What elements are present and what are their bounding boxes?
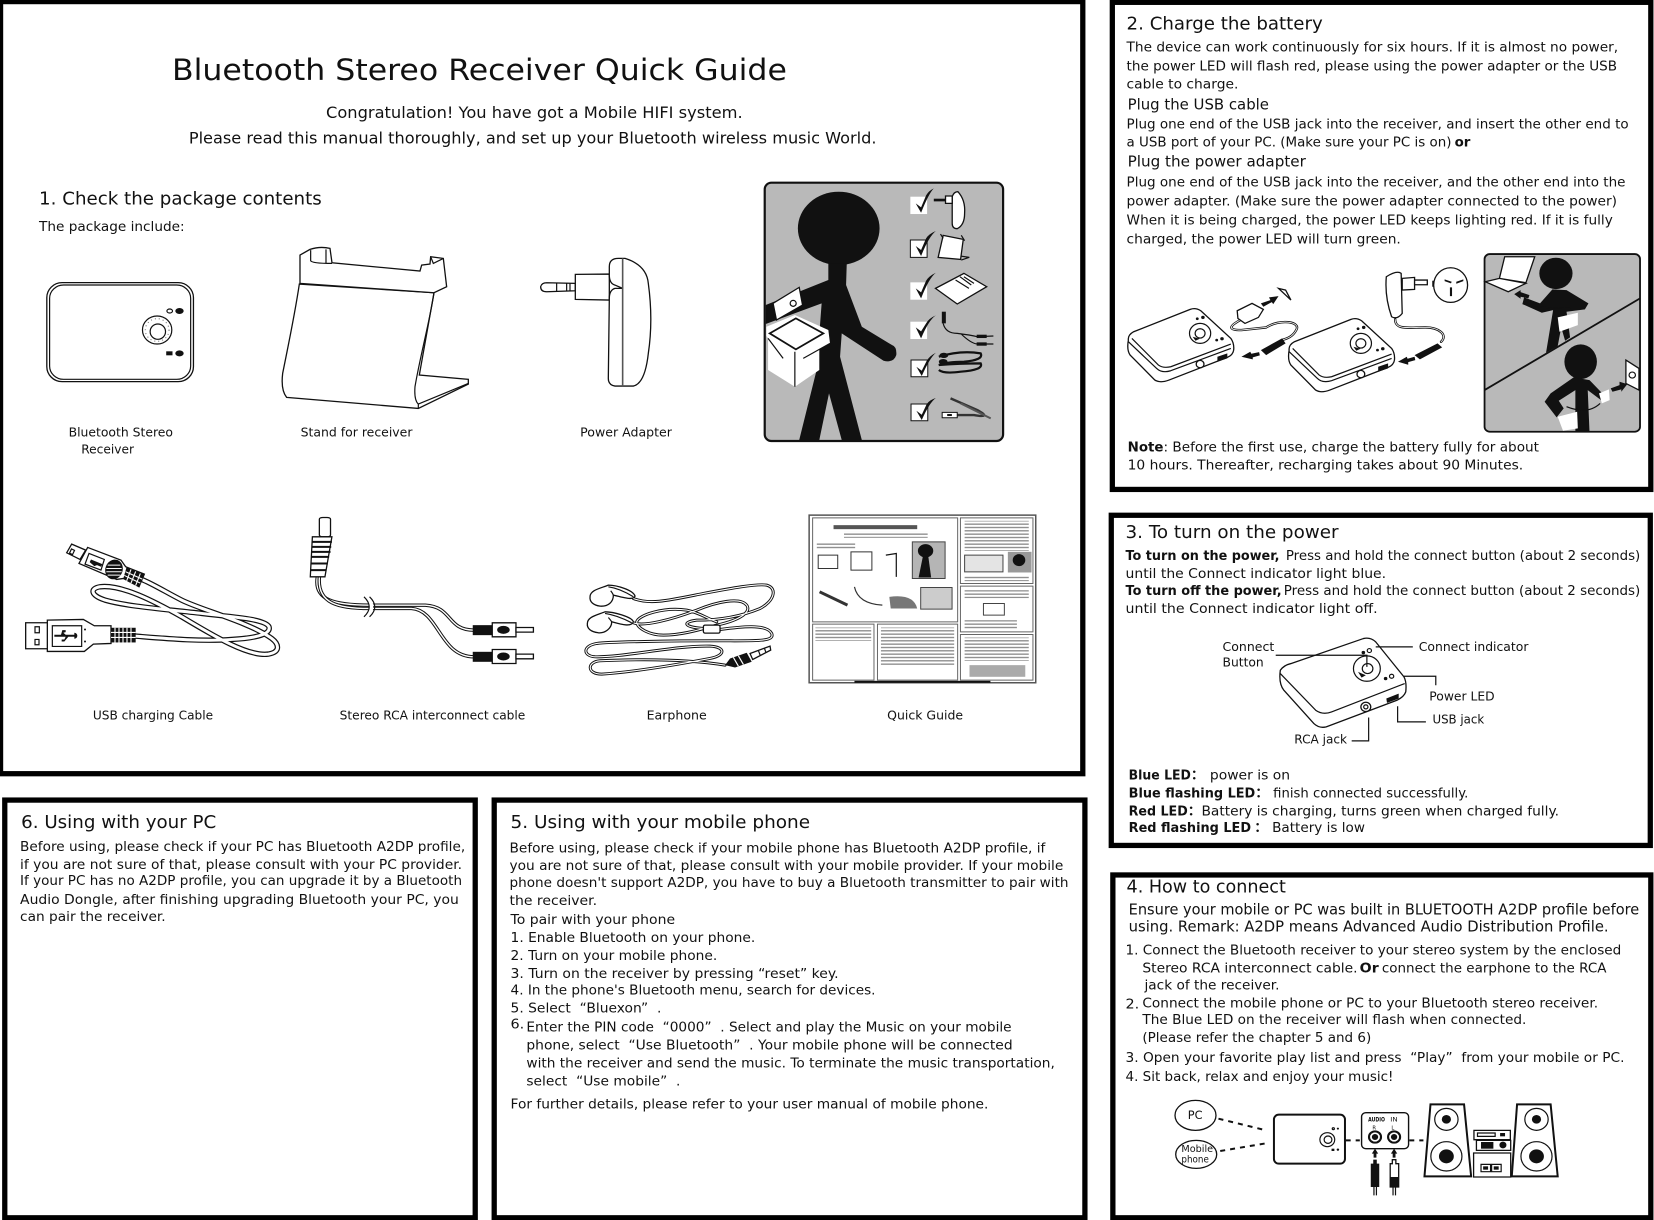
text: connection steps: 3. Open your favorite play list and press “Play” from your mobile or PC. xyxy=(1126,1050,1624,1066)
icon: receiver with power adapter xyxy=(1289,268,1468,392)
diagram: receiver with labelled parts xyxy=(1223,638,1529,747)
text: LED legend: Battery is low xyxy=(1272,820,1365,836)
illustration: charging connections xyxy=(1128,254,1640,432)
text: connection requirement: using. Remark: A2DP means Advanced Audio Distribution Profile. xyxy=(1129,918,1609,935)
labels: package row two: Stereo RCA interconnect cable xyxy=(340,707,526,722)
text: PC instructions xyxy=(20,839,465,925)
icon: laptop xyxy=(1485,257,1535,292)
diagram: receiver with labelled parts: USB jack xyxy=(1432,712,1485,727)
text: connection steps: 4. Sit back, relax and enjoy your music! xyxy=(1126,1069,1393,1085)
text: charging instructions: cable to charge. xyxy=(1127,77,1238,93)
person silhouette xyxy=(766,192,896,440)
text: connection steps: Or xyxy=(1360,961,1379,977)
text: charging instructions: The device can work continuously for six hours. If it is almost no power, xyxy=(1126,40,1618,56)
text: connection requirement xyxy=(1129,902,1639,935)
diagram: connection to speakers: R xyxy=(1372,1126,1376,1132)
panel: person illustration with checklist xyxy=(765,183,1003,441)
text: power instructions: until the Connect indicator light off. xyxy=(1126,601,1378,617)
panel: charging from laptop and outlet xyxy=(1485,254,1640,432)
text: pairing steps: 5. Select “Bluexon” . xyxy=(511,1001,661,1017)
text: LED legend xyxy=(1129,768,1559,836)
text: charging instructions xyxy=(1126,40,1629,248)
text: LED legend: ： xyxy=(1254,820,1268,836)
text: charging instructions: power adapter. (Make sure the power adapter connected to the power) xyxy=(1127,194,1617,210)
text: pairing steps: phone, select “Use Bluetooth” . Your mobile phone will be connected xyxy=(526,1038,1013,1054)
text: mobile phone introduction: the receiver. xyxy=(510,893,597,909)
text: PC instructions: if you are not sure of that, please consult with your PC provider. xyxy=(20,857,462,873)
diagram: connection to speakers: Mobile xyxy=(1181,1144,1213,1155)
text: connection steps: Connect the mobile phone or PC to your Bluetooth stereo receiver. xyxy=(1142,995,1598,1011)
text: pairing steps: For further details, please refer to your user manual of mobile phone. xyxy=(511,1097,988,1113)
diagram: connection to speakers: AUDIO xyxy=(1368,1116,1385,1123)
text: power instructions: until the Connect indicator light blue. xyxy=(1126,566,1386,582)
text: pairing steps: with the receiver and send the music. To terminate the music transportation, xyxy=(526,1055,1055,1071)
heading: using with PC: 6. Using with your PC xyxy=(21,813,216,833)
icon: mini earphones xyxy=(939,352,981,373)
text: mobile phone introduction: you are not sure of that, please consult with your mobile provider. If your mobile xyxy=(510,858,1063,874)
intro text: Please read this manual thoroughly, and set up your Bluetooth wireless music World. xyxy=(189,128,877,147)
panel: using with mobile phone xyxy=(494,800,1085,1218)
text: mobile phone introduction: phone doesn't support A2DP, you have to buy a Bluetooth transmitter to pair with xyxy=(510,875,1069,891)
text: PC instructions: Before using, please check if your PC has Bluetooth A2DP profile, xyxy=(20,839,465,855)
diagram: connection to speakers: L xyxy=(1391,1126,1394,1132)
labels: package row two: USB charging Cable xyxy=(93,707,213,722)
text: charging instructions: Plug the USB cable xyxy=(1128,97,1269,114)
text: battery note: 10 hours. Thereafter, recharging takes about 90 Minutes. xyxy=(1128,457,1523,473)
text: mobile phone introduction xyxy=(510,840,1069,909)
intro text xyxy=(189,103,877,147)
icon: earphones xyxy=(586,585,773,674)
text: power instructions: Press and hold the connect button (about 2 seconds) xyxy=(1284,583,1640,599)
icon: quick guide thumbnail xyxy=(809,515,1036,683)
diagram: connection to speakers: phone xyxy=(1181,1154,1209,1165)
diagram: receiver with labelled parts: Button xyxy=(1223,655,1264,670)
diagram: receiver with labelled parts: Connect indicator xyxy=(1419,639,1529,654)
icon: stereo RCA cable xyxy=(310,517,533,663)
labels: package row one: Receiver xyxy=(81,442,135,457)
text: pairing steps: select “Use mobile” . xyxy=(526,1073,680,1089)
person with pouch at laptop xyxy=(1514,258,1588,353)
diagram: receiver with labelled parts: Connect xyxy=(1223,639,1274,654)
text: connection steps: 1. Connect the Bluetooth receiver to your stereo system by the enclosed xyxy=(1126,943,1621,959)
text: power instructions: To turn on the power, xyxy=(1126,548,1280,564)
diagram: connection to speakers: IN xyxy=(1390,1116,1398,1123)
diagram: connection to speakers: PC xyxy=(1188,1109,1203,1122)
text: LED legend: Red LED xyxy=(1129,803,1188,819)
text: LED legend: Blue LED xyxy=(1129,768,1191,784)
panel: using with PC xyxy=(5,800,475,1218)
panel: charge the battery xyxy=(1112,2,1651,489)
labels: package row two: Earphone xyxy=(647,707,707,722)
text: charging instructions: When it is being charged, the power LED keeps lighting red. If it is fully xyxy=(1127,213,1613,229)
icon: mini USB cable xyxy=(942,398,991,418)
diagram: connection to speakers xyxy=(1175,1100,1558,1195)
checklist xyxy=(910,188,993,421)
labels: package row one xyxy=(69,425,673,457)
icon: receiver in hand xyxy=(773,287,803,320)
heading: check the package contents: 1. Check the package contents xyxy=(39,190,322,210)
heading: using with mobile phone: 5. Using with your mobile phone xyxy=(511,813,810,833)
icon: stand xyxy=(282,247,468,408)
text: LED legend: Red flashing LED xyxy=(1129,820,1251,836)
panel: title and package contents xyxy=(1,2,1083,774)
icon: power adapter xyxy=(541,258,651,386)
icon: mini RCA cable xyxy=(942,312,993,346)
icon: mini adapter xyxy=(934,192,965,229)
icon: mini guide xyxy=(935,273,987,304)
text: power instructions: To turn off the power, xyxy=(1126,583,1282,599)
text: PC instructions: can pair the receiver. xyxy=(20,909,166,925)
text: connection steps: jack of the receiver. xyxy=(1143,977,1280,993)
panel: how to connect xyxy=(1113,875,1651,1218)
text: battery note xyxy=(1128,439,1539,473)
intro text: Congratulation! You have got a Mobile HIFI system. xyxy=(326,103,743,122)
text: pairing steps: 4. In the phone's Bluetooth menu, search for devices. xyxy=(511,983,876,999)
icon: USB charging cable xyxy=(26,544,277,654)
text: pairing steps: To pair with your phone xyxy=(510,912,675,928)
text: charging instructions: Plug one end of the USB jack into the receiver, and the other end into the xyxy=(1127,175,1625,191)
text: pairing steps: Enter the PIN code “0000” . Select and play the Music on your mobile xyxy=(526,1020,1012,1036)
text: connection steps: The Blue LED on the receiver will flash when connected. xyxy=(1141,1012,1526,1028)
diagram: receiver with labelled parts: Power LED xyxy=(1429,688,1495,703)
heading: how to connect: 4. How to connect xyxy=(1127,877,1286,897)
text: battery note: : Before the first use, charge the battery fully for about xyxy=(1163,439,1539,455)
panel: turn on the power xyxy=(1111,515,1650,845)
title: Bluetooth Stereo Receiver Quick Guide xyxy=(172,53,787,87)
text: pairing steps: 1. Enable Bluetooth on your phone. xyxy=(511,930,755,946)
text: package include: The package include: xyxy=(38,219,185,235)
text: connection steps: Stereo RCA interconnect cable. xyxy=(1142,961,1358,977)
text: connection steps xyxy=(1126,943,1624,1085)
labels: package row one: Power Adapter xyxy=(580,425,673,440)
text: power instructions xyxy=(1126,548,1640,617)
icon: receiver with USB cable xyxy=(1128,288,1297,382)
person with pouch at outlet xyxy=(1545,344,1639,432)
diagram: receiver with labelled parts: RCA jack xyxy=(1294,732,1348,747)
icon: open box xyxy=(766,315,830,387)
labels: package row two: Quick Guide xyxy=(887,707,963,722)
icon: mini stand xyxy=(938,234,969,260)
text: charging instructions: or xyxy=(1455,135,1471,151)
text: LED legend: Battery is charging, turns green when charged fully. xyxy=(1201,803,1559,819)
labels: package row two xyxy=(93,707,963,722)
text: pairing steps: 6. xyxy=(511,1016,524,1032)
text: pairing steps: 2. Turn on your mobile phone. xyxy=(511,948,717,964)
labels: package row one: Bluetooth Stereo xyxy=(69,425,173,440)
heading: turn on the power: 3. To turn on the power xyxy=(1126,523,1339,543)
text: connection steps: connect the earphone to the RCA xyxy=(1382,961,1607,977)
text: LED legend: finish connected successfully. xyxy=(1273,785,1468,801)
labels: package row one: Stand for receiver xyxy=(301,425,413,440)
text: charging instructions: a USB port of your PC. (Make sure your PC is on) xyxy=(1127,135,1451,151)
icon: bluetooth receiver xyxy=(47,283,193,382)
text: battery note: Note xyxy=(1128,439,1163,455)
text: LED legend: ： xyxy=(1188,803,1201,819)
text: connection steps: (Please refer the chapter 5 and 6) xyxy=(1142,1030,1371,1046)
text: LED legend: ： xyxy=(1191,768,1204,784)
text: LED legend: ： xyxy=(1255,785,1269,801)
text: connection requirement: Ensure your mobile or PC was built in BLUETOOTH A2DP profile before xyxy=(1129,902,1639,919)
text: PC instructions: Audio Dongle, after finishing upgrading Bluetooth your PC, you xyxy=(20,892,459,908)
text: LED legend: power is on xyxy=(1210,768,1290,784)
text: PC instructions: If your PC has no A2DP profile, you can upgrade it by a Bluetooth xyxy=(20,873,462,889)
text: pairing steps xyxy=(510,912,1055,1113)
text: power instructions: Press and hold the connect button (about 2 seconds) xyxy=(1286,548,1640,564)
text: charging instructions: charged, the power LED will turn green. xyxy=(1127,232,1401,248)
text: charging instructions: the power LED will flash red, please using the power adapter or the USB xyxy=(1127,59,1617,75)
heading: charge the battery: 2. Charge the battery xyxy=(1127,15,1323,35)
text: charging instructions: Plug one end of the USB jack into the receiver, and insert the other end to xyxy=(1127,117,1629,133)
text: LED legend: Blue flashing LED xyxy=(1129,785,1255,801)
text: mobile phone introduction: Before using, please check if your mobile phone has Bluetooth A2DP profile, if xyxy=(510,840,1047,856)
text: connection steps: 2. xyxy=(1126,996,1139,1012)
text: charging instructions: Plug the power adapter xyxy=(1128,154,1307,171)
text: pairing steps: 3. Turn on the receiver by pressing “reset” key. xyxy=(511,966,839,982)
